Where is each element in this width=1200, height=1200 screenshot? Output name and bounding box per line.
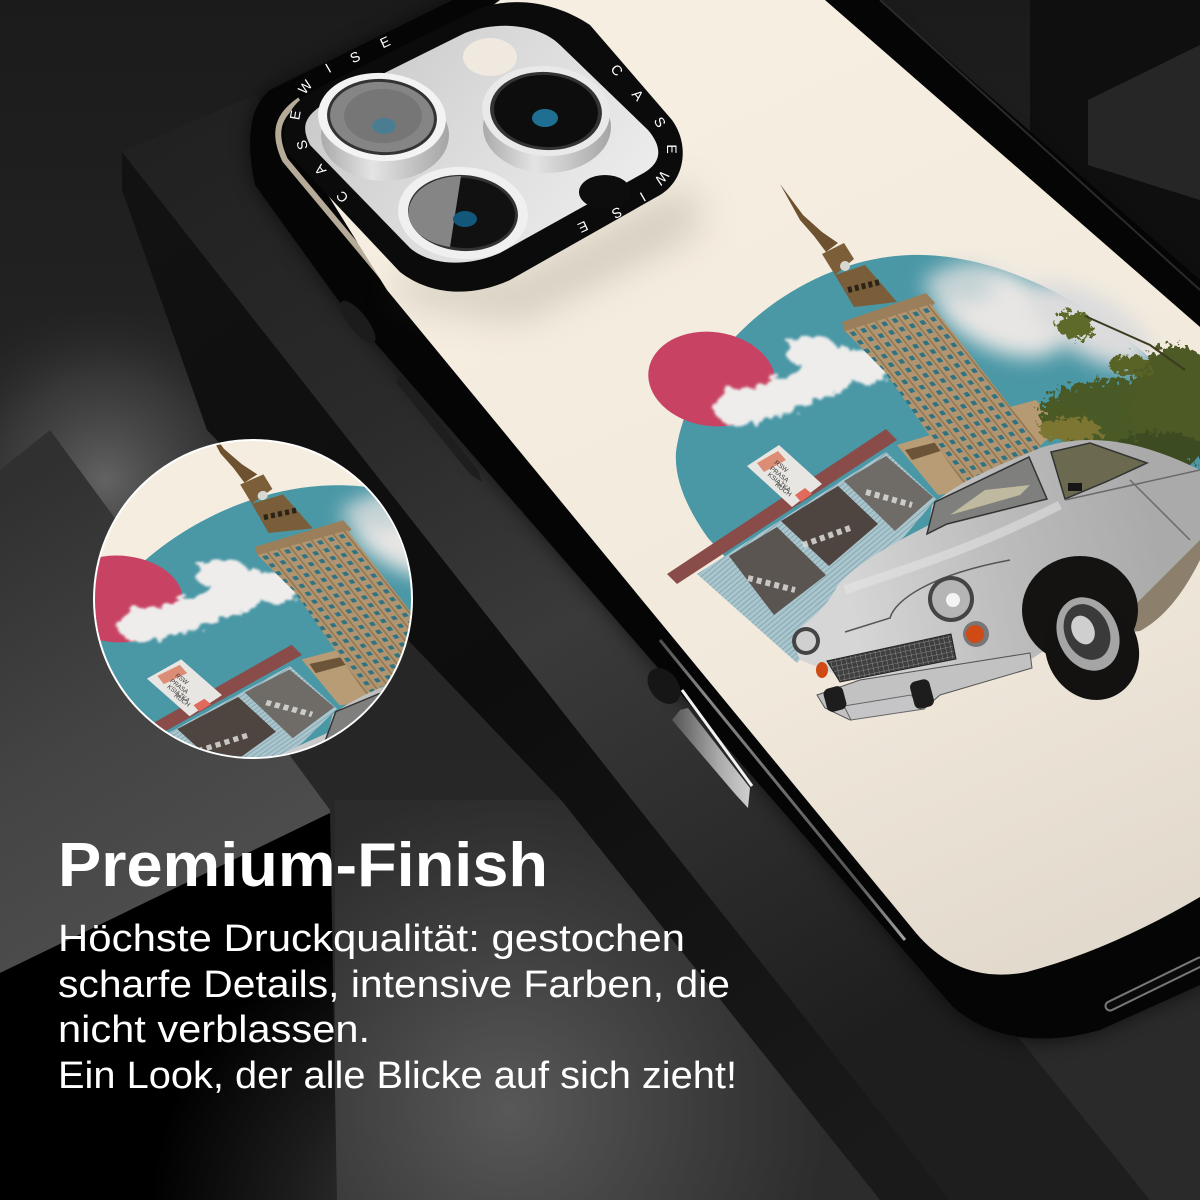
kiosk	[667, 429, 936, 663]
brand text ring	[286, 33, 680, 236]
vintage car	[792, 440, 1200, 720]
brand text ring: E	[377, 33, 393, 51]
brand text ring: I	[637, 189, 649, 205]
brand text ring: A	[629, 86, 648, 104]
bottom port	[1110, 962, 1200, 1006]
camera island	[284, 2, 683, 292]
red sun	[642, 324, 782, 434]
kiosk sign: PRASA	[768, 465, 790, 485]
body text: scharfe Details, intensive Farben, die	[58, 964, 730, 1006]
wheel	[1022, 556, 1138, 664]
grille	[827, 634, 956, 682]
kiosk sign: RUCH	[773, 481, 793, 499]
body text	[58, 918, 737, 1097]
wing buildings	[897, 400, 1061, 495]
stepped block: lower left	[0, 430, 880, 1200]
kiosk sign	[747, 445, 822, 507]
road	[1060, 470, 1200, 640]
lens: upper right	[479, 62, 613, 173]
kiosk sign: RSW	[773, 459, 790, 475]
brand text ring: S	[651, 114, 669, 130]
palace tower	[780, 184, 1045, 500]
bumper	[817, 653, 1032, 720]
cream case back	[300, 0, 1200, 975]
brand text ring: W	[651, 168, 672, 189]
brand text ring: A	[310, 161, 329, 179]
camera glass	[305, 26, 658, 263]
big cloud	[918, 243, 1166, 386]
brand text ring: S	[347, 48, 363, 66]
brand text ring: I	[322, 60, 334, 76]
magnified detail circle	[93, 439, 413, 759]
brand text ring: C	[333, 188, 351, 206]
kiosk sign: KSIĄŻKA	[766, 470, 794, 494]
body text: Ein Look, der alle Blicke auf sich zieht!	[58, 1055, 737, 1097]
sensor hole	[579, 175, 631, 209]
body text: Höchste Druckqualität: gestochen	[58, 918, 685, 960]
body text: nicht verblassen.	[58, 1009, 370, 1051]
camera island shadow	[400, 185, 700, 320]
brand text ring: E	[664, 144, 680, 154]
windows	[927, 457, 1047, 534]
car body	[792, 440, 1200, 690]
camera ring	[284, 2, 683, 292]
brand text ring: S	[293, 138, 311, 152]
title: Premium-Finish	[58, 831, 548, 900]
small cloud	[714, 336, 892, 427]
brand text ring: E	[286, 109, 304, 121]
brand text ring: E	[575, 218, 591, 236]
phone case body	[250, 0, 1200, 1041]
brand text ring: C	[608, 61, 626, 79]
lens: bottom	[395, 163, 531, 263]
collage artwork	[642, 184, 1200, 720]
lights	[928, 576, 974, 622]
sky disc	[676, 255, 1200, 640]
tree branch	[1085, 316, 1185, 370]
flash	[463, 38, 517, 76]
lens: upper left	[315, 69, 449, 181]
brand text ring: S	[609, 204, 625, 222]
brand text ring: W	[295, 76, 316, 97]
stepped block: upper platform	[122, 95, 1150, 1200]
phone buttons	[335, 296, 752, 808]
tree	[1038, 311, 1200, 468]
